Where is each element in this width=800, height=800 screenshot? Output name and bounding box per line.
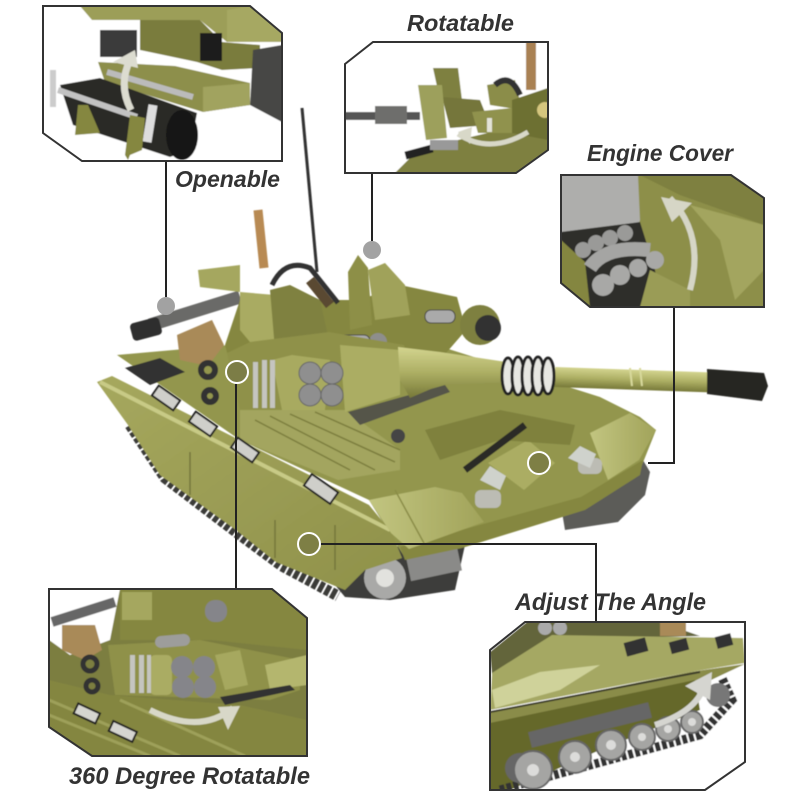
black rear grille	[125, 358, 185, 385]
tan crate	[177, 320, 224, 366]
rear cannon	[129, 297, 240, 342]
front plate	[400, 460, 643, 560]
grille slats	[253, 360, 275, 408]
main gun	[398, 347, 768, 401]
right tracks	[560, 455, 650, 530]
side skirt	[97, 376, 402, 590]
callout ring: adjust angle	[298, 533, 320, 555]
left tracks	[130, 425, 338, 596]
commander block	[198, 265, 240, 292]
spare wheel	[460, 305, 501, 345]
headlights	[475, 446, 602, 508]
label: rotatable: Rotatable	[407, 10, 514, 36]
panel: adjust the angle	[490, 621, 745, 790]
panel: openable	[43, 6, 282, 161]
turret side plate	[227, 332, 408, 410]
panel: engine cover	[561, 175, 764, 307]
upper turret mass	[225, 285, 466, 400]
periscope lens	[369, 333, 387, 351]
central tank model	[97, 108, 768, 600]
open hatch	[348, 255, 410, 330]
right front armor	[590, 413, 656, 480]
hatch ring	[272, 265, 338, 305]
smoke launchers	[299, 362, 343, 406]
panel: 360 degree rotatable	[49, 589, 307, 756]
panel: rotatable	[345, 42, 553, 173]
callout dot: openable	[157, 297, 175, 315]
left front armor	[369, 487, 484, 549]
callout ring: engine cover	[528, 452, 550, 474]
turret base	[348, 385, 450, 425]
label: 360 degree rotatable: 360 Degree Rotatable	[69, 763, 310, 790]
label: openable: Openable	[175, 166, 280, 192]
label: adjust the angle: Adjust The Angle	[514, 589, 706, 616]
engine deck ribs	[240, 410, 400, 480]
center glacis plates	[488, 440, 555, 490]
dark side guns	[201, 363, 216, 402]
hull deck	[117, 340, 656, 558]
callout ring: 360 turret	[226, 361, 248, 383]
label: engine cover: Engine Cover	[587, 140, 734, 166]
tan periscope	[258, 210, 264, 268]
callout dot: rotatable	[363, 241, 381, 259]
fuel drums on skirt	[152, 386, 338, 504]
connector lines	[166, 161, 674, 625]
side grenade tubes	[340, 310, 455, 348]
front track and wheel	[335, 545, 465, 600]
antenna	[302, 108, 317, 272]
